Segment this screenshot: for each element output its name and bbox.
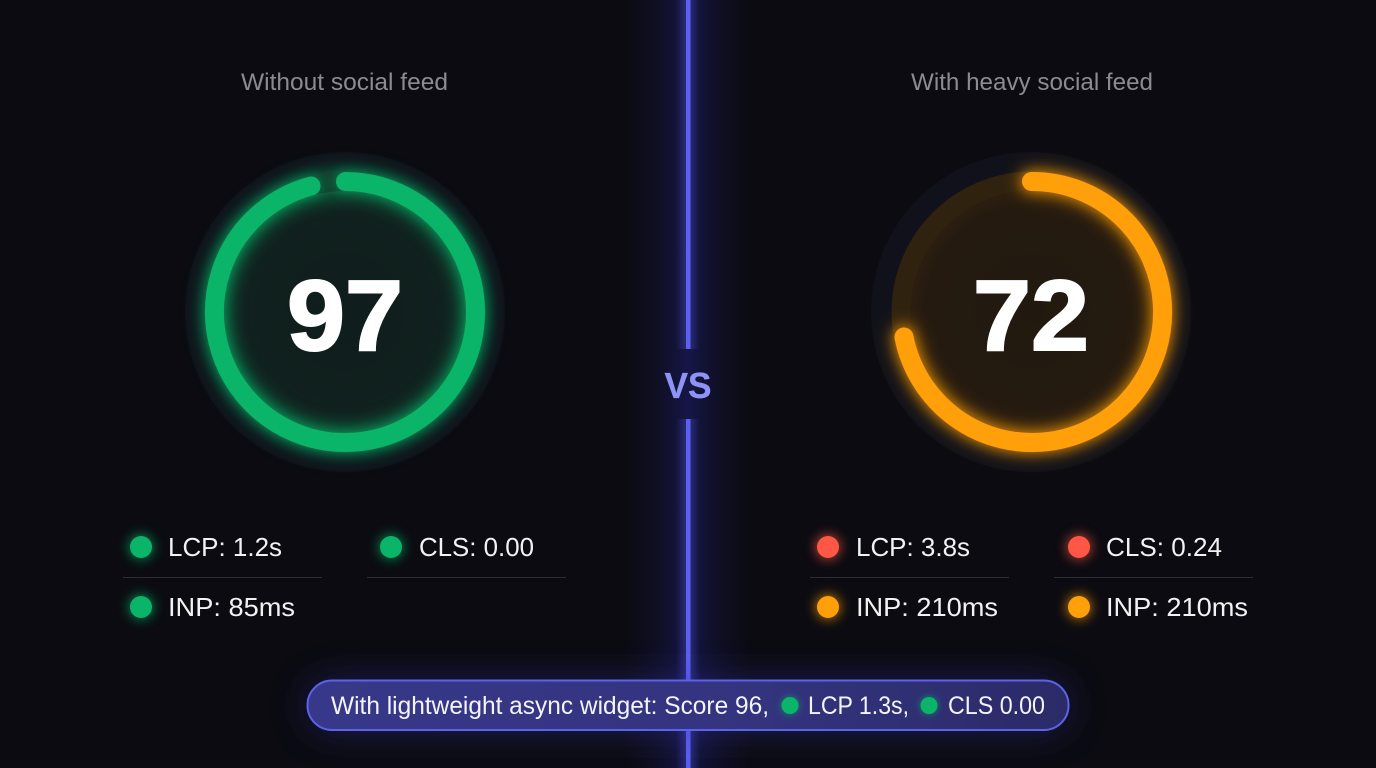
metric: INP 210ms: INP: 210ms [856, 592, 998, 622]
metric: INP 210ms second: INP: 210ms [1106, 592, 1248, 622]
panel: without social feed [123, 69, 566, 622]
score gauge: 72 [871, 152, 1191, 472]
metric: LCP 3.8s: LCP: 3.8s [856, 532, 970, 562]
heading: with heavy social feed: With heavy social feed [911, 69, 1153, 96]
callout text: With lightweight async widget: Score 96, [331, 692, 769, 720]
callout CLS: CLS 0.00 [948, 692, 1045, 720]
divider line bottom [678, 419, 698, 768]
center glow [638, 0, 738, 768]
metric: INP 85ms: INP: 85ms [168, 592, 295, 622]
divider line top [678, 0, 698, 349]
score number: 97 [287, 260, 403, 372]
callout status dot [920, 696, 938, 714]
callout status dot [781, 696, 799, 714]
score number: 72 [973, 260, 1089, 372]
metric: LCP 1.2s: LCP: 1.2s [168, 532, 282, 562]
panel: with heavy social feed [810, 69, 1253, 622]
metric: CLS 0.24: CLS: 0.24 [1106, 532, 1222, 562]
VS label: VS [664, 365, 712, 406]
heading: without social feed: Without social feed [241, 69, 448, 96]
callout LCP: LCP 1.3s, [808, 692, 909, 720]
callout pill [308, 680, 1068, 730]
score gauge: 97 [185, 152, 505, 472]
metric: CLS 0.00: CLS: 0.00 [419, 532, 534, 562]
